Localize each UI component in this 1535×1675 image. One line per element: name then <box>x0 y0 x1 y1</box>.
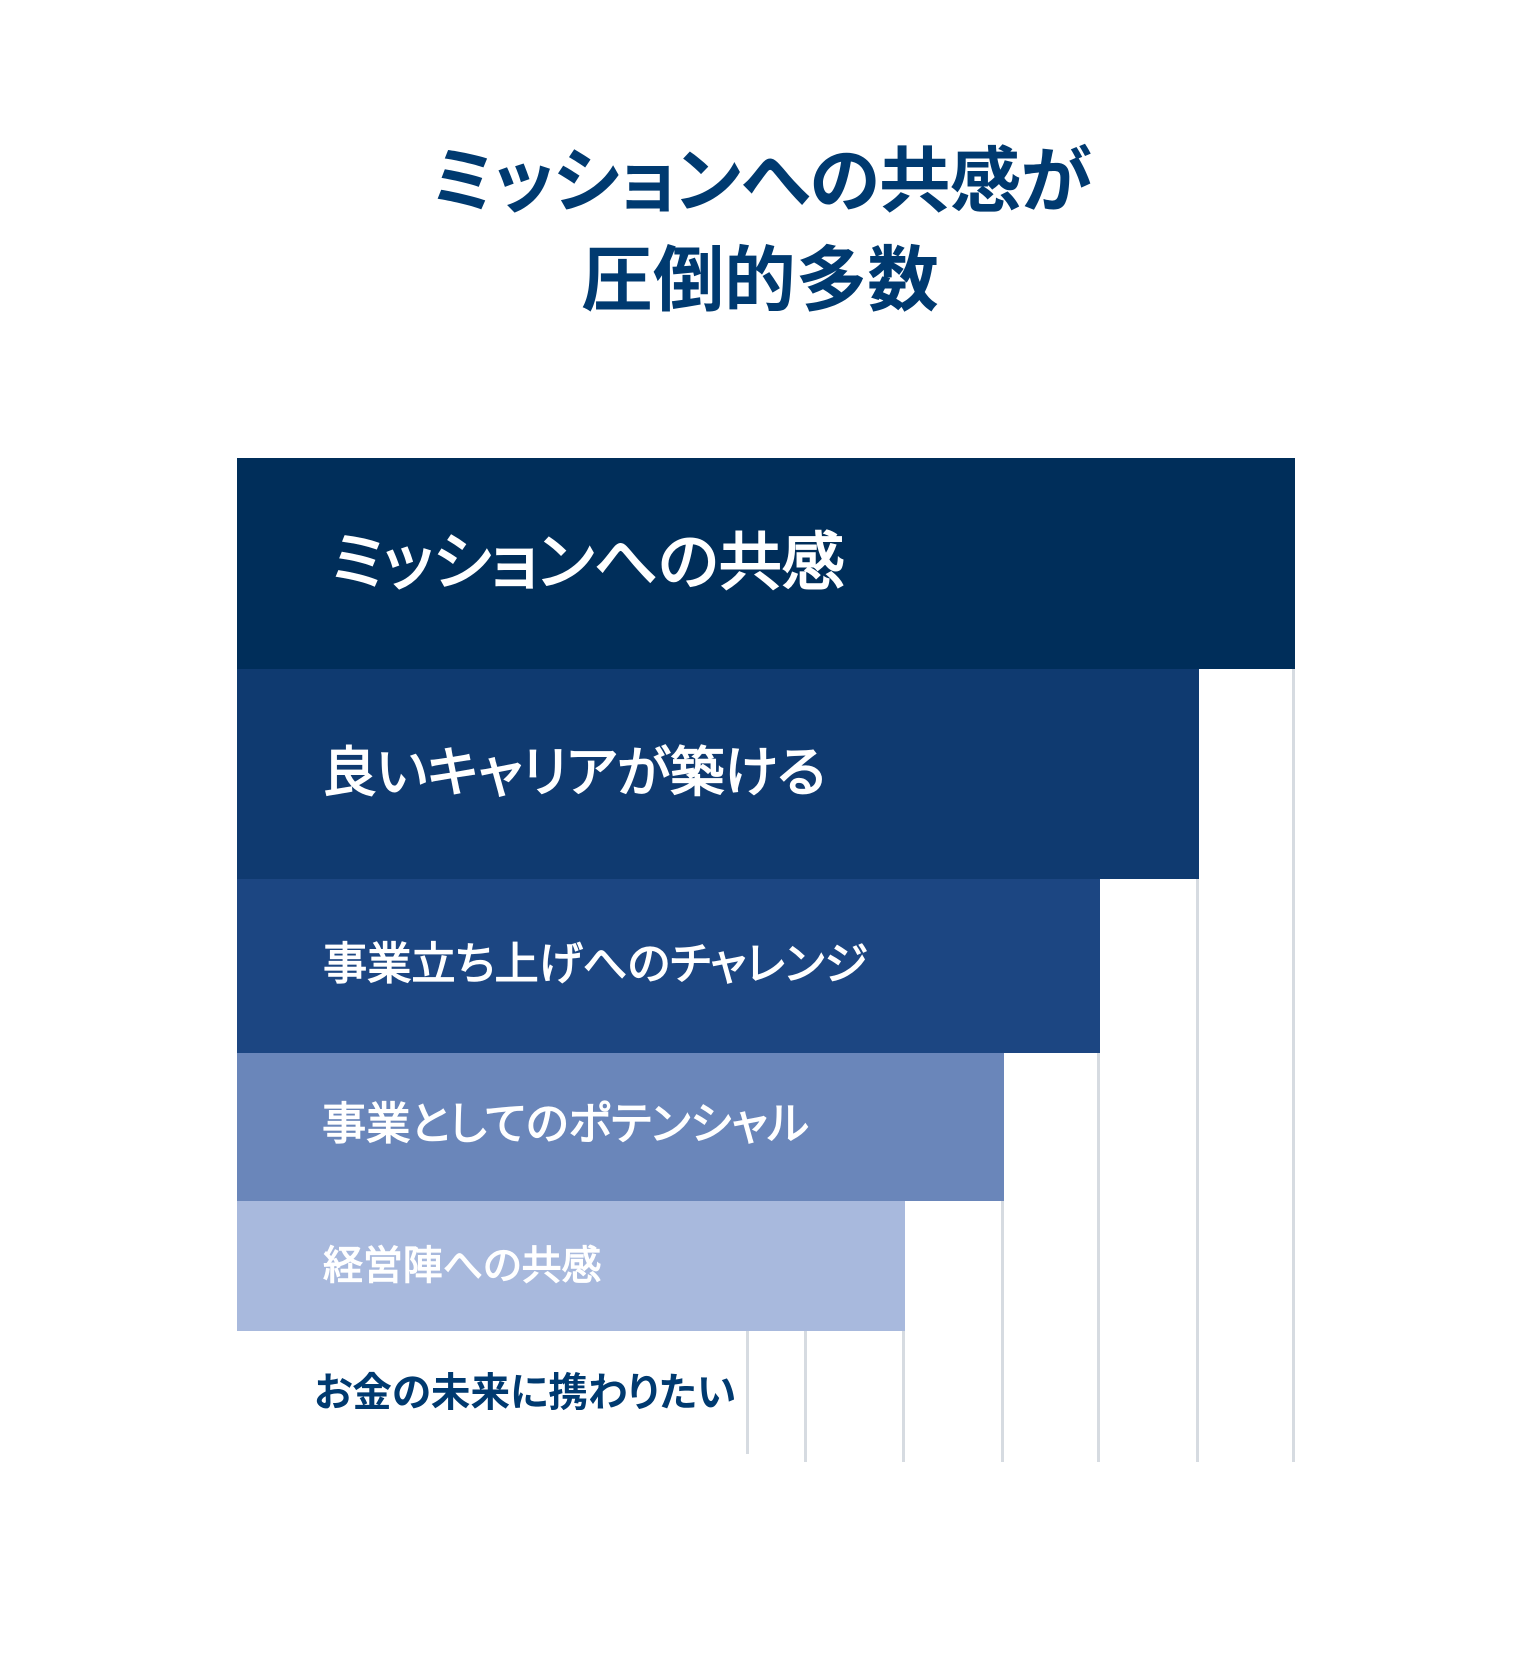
title <box>431 142 1091 321</box>
bar: 経営陣への共感: 経営陣への共感 <box>323 1244 601 1288</box>
bar: ミッションへの共感: ミッションへの共感 <box>332 528 845 598</box>
bar: 事業立ち上げへのチャレンジ <box>237 879 1100 1053</box>
bar: 経営陣への共感 <box>237 1201 905 1331</box>
bar: 事業としてのポテンシャル: 事業としてのポテンシャル <box>322 1100 809 1149</box>
bar: 事業立ち上げへのチャレンジ: 事業立ち上げへのチャレンジ <box>323 940 868 989</box>
title: 圧倒的多数 <box>581 241 939 321</box>
title: ミッションへの共感が <box>431 142 1091 222</box>
chart: funnel of motivations <box>237 458 1295 1462</box>
grid lines <box>746 669 1295 1462</box>
bar: 事業としてのポテンシャル <box>237 1053 1004 1201</box>
bar: ミッションへの共感 <box>237 458 1295 669</box>
bar: 良いキャリアが築ける: 良いキャリアが築ける <box>322 743 826 803</box>
label: お金の未来に携わりたい: お金の未来に携わりたい <box>314 1371 736 1415</box>
bar: 良いキャリアが築ける <box>237 669 1199 879</box>
